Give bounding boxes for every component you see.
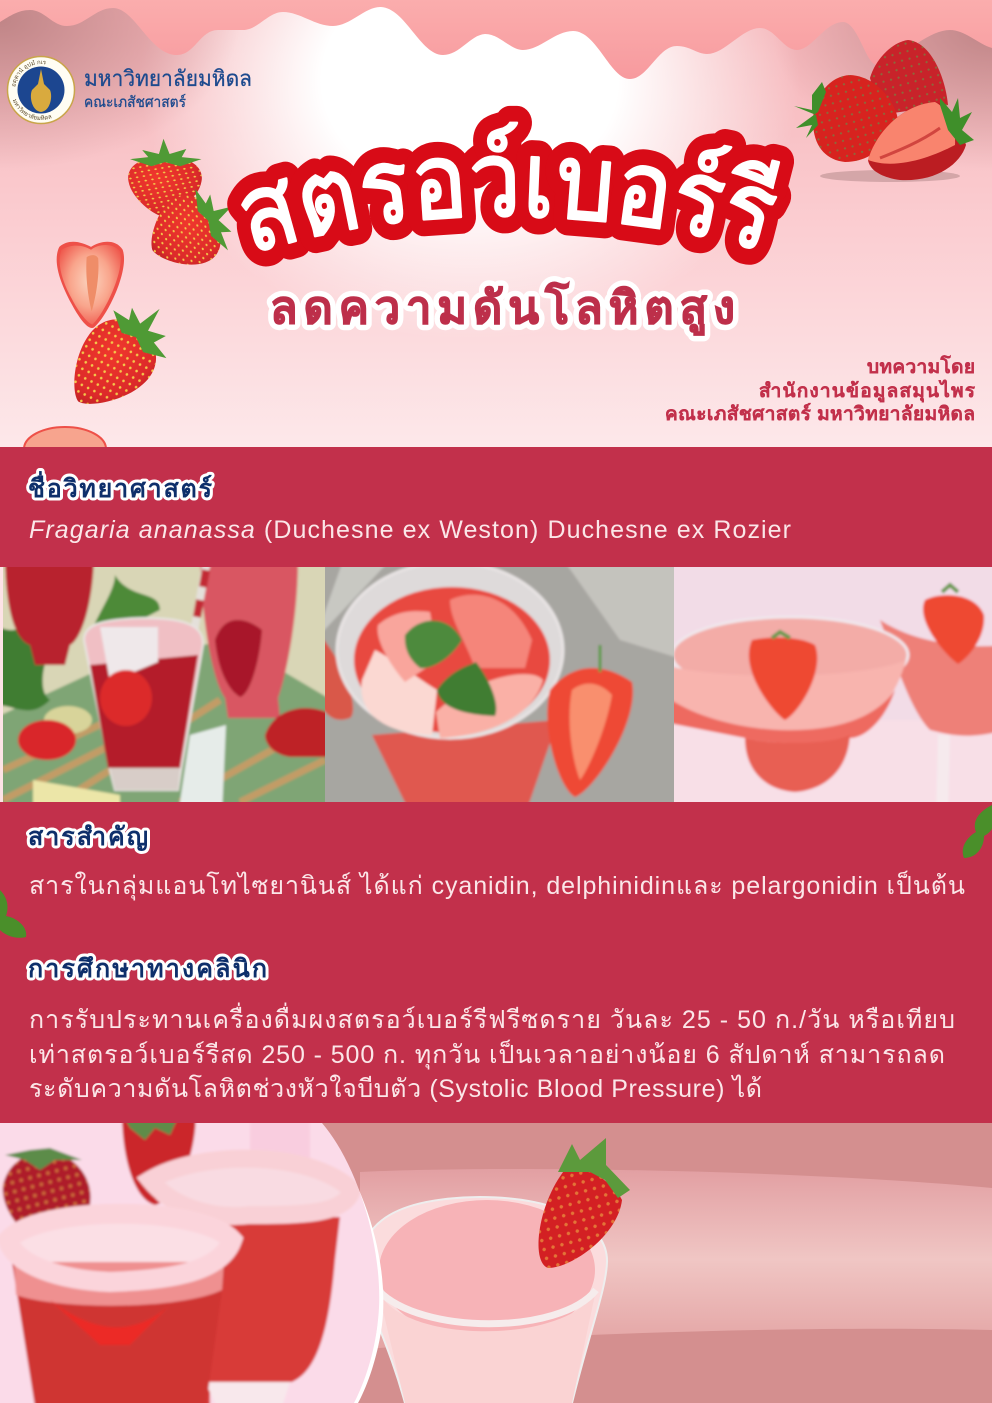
heading: key compounds: สารสำคัญ: [28, 823, 148, 851]
blurred strawberry behind: [325, 640, 354, 721]
mint: [3, 627, 50, 712]
strawberry 3: [74, 308, 166, 404]
back glass left: [5, 560, 94, 665]
photo: strawberry mojito: [3, 567, 325, 802]
mint leaves: [405, 621, 462, 668]
heading: clinical studies: การศึกษาทางคลินิก: [28, 955, 267, 983]
subtitle: ลดความดันโลหิตสูง: [270, 281, 735, 336]
front glass drink: [12, 1262, 226, 1403]
photo: strawberry punch in a glass: [325, 567, 674, 802]
photo: strawberry margaritas: [674, 567, 992, 794]
logo: Mahidol University: มหาวิทยาลัยมหิดล: [13, 99, 52, 120]
garnish leaves: [558, 1138, 630, 1198]
white arc frame: [310, 1123, 383, 1403]
pink icing drip: [0, 0, 992, 79]
key compounds text: สารในกลุ่มแอนโทไซยานินส์ ได้แก่ cyanidin, delphinidinและ pelargonidin เป็นต้น: [29, 870, 965, 901]
back glass: [880, 620, 992, 736]
lime: [44, 706, 92, 734]
clinical studies paragraph: เท่าสตรอว์เบอร์รีสด 250 - 500 ก. ทุกวัน เป็นเวลาอย่างน้อย 6 สัปดาห์ สามารถลด: [29, 1039, 945, 1070]
logo wordmark: [84, 66, 252, 111]
strawberries top right: [794, 40, 974, 182]
strawberry 2: [151, 189, 232, 265]
back strawberry: [870, 40, 948, 115]
byline: [665, 355, 976, 425]
drink: [354, 587, 550, 733]
glass body: [372, 720, 552, 802]
photo: strawberry smoothies with sugar rim: [0, 1113, 390, 1403]
heading: scientific name: ชื่อวิทยาศาสตร์: [28, 471, 213, 503]
scientific name text: Fragaria ananassa (Duchesne ex Weston) Duchesne ex Rozier: [29, 516, 791, 544]
strawberry slice at bottom: [23, 426, 107, 447]
bottom background: [0, 1123, 992, 1403]
clinical studies paragraph: [29, 1002, 955, 1103]
logo wordmark: มหาวิทยาลัยมหิดล: [84, 66, 252, 91]
byline: คณะเภสัชศาสตร์ มหาวิทยาลัยมหิดล: [665, 403, 975, 425]
whole strawberry right: [264, 706, 325, 758]
back sugar rim: [150, 1159, 352, 1216]
front strawberry leaf: [5, 1148, 82, 1170]
clinical studies paragraph: ระดับความดันโลหิตช่วงหัวใจบีบตัว (Systolic Blood Pressure) ได้: [29, 1074, 762, 1103]
front glass rim: [674, 618, 912, 676]
front strawberry: [813, 75, 898, 162]
half leaves: [940, 98, 974, 145]
back glass drink: [204, 1215, 342, 1403]
mint leaf left: [0, 890, 26, 938]
shadow: [820, 170, 960, 182]
strawberry slices: [361, 650, 437, 735]
strawberry half: [57, 242, 124, 328]
title: สตรอว์เบอร์รี: [241, 122, 780, 251]
strawberry slice 1: [749, 637, 817, 720]
front sugar rim: [8, 1214, 232, 1282]
strawberry left: [18, 720, 76, 760]
leaves: [794, 82, 826, 138]
band: key compounds and clinical studies: [0, 802, 992, 1123]
main glass: [84, 618, 203, 790]
strawberries falling on the left: [23, 138, 232, 447]
halved strawberry: [547, 668, 633, 797]
header background: [0, 0, 992, 447]
clinical studies paragraph: การรับประทานเครื่องดื่มผงสตรอว์เบอร์รีฟรีซดราย วันละ 25 - 50 ก./วัน หรือเทียบ: [29, 1002, 955, 1034]
front glass liquid: [674, 660, 906, 732]
byline: สำนักงานข้อมูลสมุนไพร: [759, 379, 976, 403]
back glass right: [200, 560, 298, 718]
glass rim: [337, 562, 563, 738]
band: scientific name: [0, 447, 992, 567]
front rim interior: [30, 1224, 220, 1264]
strawberry 1: [128, 139, 202, 217]
front strawberry: [1, 1157, 92, 1224]
milkshake glass: [362, 1138, 630, 1403]
strawberry slice 2: [923, 595, 984, 664]
logo: Mahidol University: อตฺตานํ อุปมํ กเร: [12, 60, 46, 86]
title: สตรอว์เบอร์รี: [227, 106, 794, 266]
ice: [178, 725, 226, 815]
byline: บทความโดย: [867, 355, 975, 378]
strawberry garnish: [538, 1166, 622, 1268]
half strawberry: [868, 102, 966, 180]
photo strip background: [0, 567, 992, 802]
mint leaf right: [963, 805, 992, 858]
back rim interior: [154, 1168, 310, 1204]
subtitle: ลดความดันโลหิตสูง: [270, 281, 735, 336]
back strawberry: [122, 1113, 196, 1205]
logo: Mahidol University: [6, 56, 76, 124]
straw: [190, 567, 212, 628]
logo wordmark: คณะเภสัชศาสตร์: [84, 94, 186, 111]
